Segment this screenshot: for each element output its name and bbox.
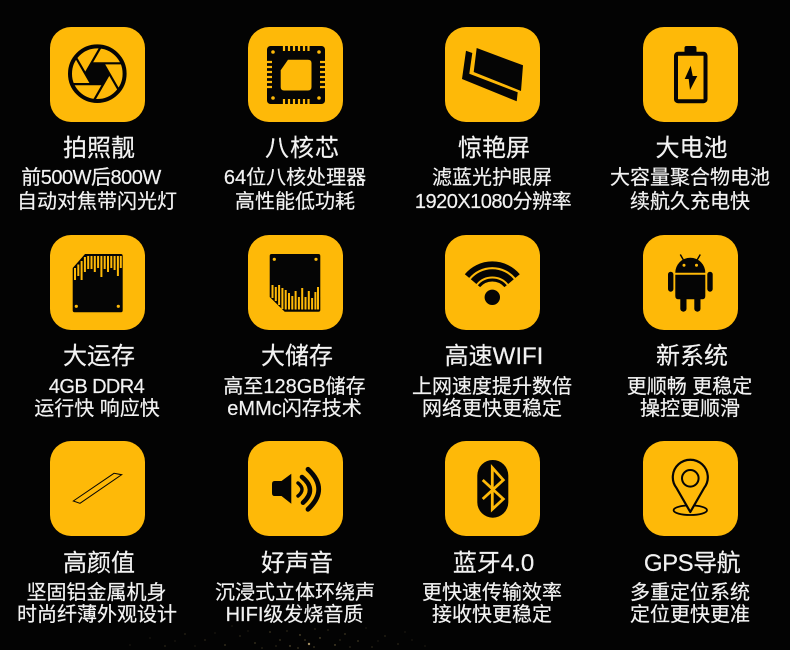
text: line 2: HIFI级发烧音质 (226, 604, 363, 626)
icon: memory card (50, 235, 145, 330)
text: line 1: 大容量聚合物电池 (610, 167, 770, 189)
card: 八核芯 (224, 27, 366, 213)
text: line 1: 沉浸式立体环绕声 (215, 582, 375, 604)
heading: GPS导航 (644, 550, 740, 577)
text: line 2: 1920X1080分辨率 (415, 191, 571, 213)
icon: bluetooth (445, 441, 540, 536)
text: line 2: 操控更顺滑 (640, 398, 740, 420)
heading: 八核芯 (265, 135, 340, 162)
card: 高颜值 (17, 441, 177, 626)
text: line 2: 时尚纤薄外观设计 (17, 604, 177, 626)
text: line 2: 续航久充电快 (630, 191, 750, 213)
text: line 1: 更顺畅 更稳定 (627, 376, 752, 398)
heading: 大运存 (63, 343, 135, 370)
icon: speaker (248, 441, 343, 536)
heading: 拍照靓 (63, 135, 135, 162)
text: line 2: 自动对焦带闪光灯 (17, 191, 177, 213)
text: line 1: 更快速传输效率 (422, 582, 562, 604)
text: line 1: 多重定位系统 (630, 582, 750, 604)
card: 大储存 (223, 235, 366, 420)
text: line 2: 运行快 响应快 (34, 398, 160, 420)
heading: 蓝牙4.0 (453, 550, 534, 577)
text: line 1: 前500W后800W (21, 167, 161, 189)
card: 新系统 (627, 235, 752, 420)
card: 大电池 (610, 27, 770, 213)
icon: camera aperture (50, 27, 145, 122)
heading: 好声音 (261, 550, 333, 577)
card: 大运存 (34, 235, 160, 420)
heading: 大储存 (261, 343, 333, 370)
text: line 2: 定位更快更准 (630, 604, 750, 626)
heading: 惊艳屏 (458, 135, 530, 162)
heading: 高速WIFI (445, 343, 543, 370)
icon: android robot (643, 235, 738, 330)
text: line 1: 坚固铝金属机身 (26, 582, 166, 604)
icon: storage card (248, 235, 343, 330)
text: line 1: 4GB DDR4 (49, 376, 144, 398)
text: line 2: eMMc闪存技术 (227, 398, 362, 420)
icon: processor chip (248, 27, 343, 122)
icon: wifi signal (445, 235, 540, 330)
text: line 2: 接收快更稳定 (432, 604, 552, 626)
card: 惊艳屏 (415, 27, 571, 213)
card: 高速WIFI (412, 235, 572, 420)
card: 拍照靓 (17, 27, 177, 213)
heading: 高颜值 (63, 550, 135, 577)
icon: battery (643, 27, 738, 122)
text: line 2: 网络更快更稳定 (422, 398, 562, 420)
heading: 新系统 (656, 343, 728, 370)
text: line 1: 高至128GB储存 (223, 376, 366, 398)
text: line 1: 64位八核处理器 (224, 167, 366, 189)
text: line 2: 高性能低功耗 (235, 191, 355, 213)
card: GPS导航 (630, 441, 750, 626)
text: line 1: 滤蓝光护眼屏 (432, 167, 552, 189)
icon: location pin (643, 441, 738, 536)
icon: screen panels (445, 27, 540, 122)
icon: slim profile (50, 441, 145, 536)
card: 好声音 (215, 441, 375, 626)
text: line 1: 上网速度提升数倍 (412, 376, 572, 398)
heading: 大电池 (656, 135, 728, 162)
card: 蓝牙4.0 (422, 441, 562, 626)
